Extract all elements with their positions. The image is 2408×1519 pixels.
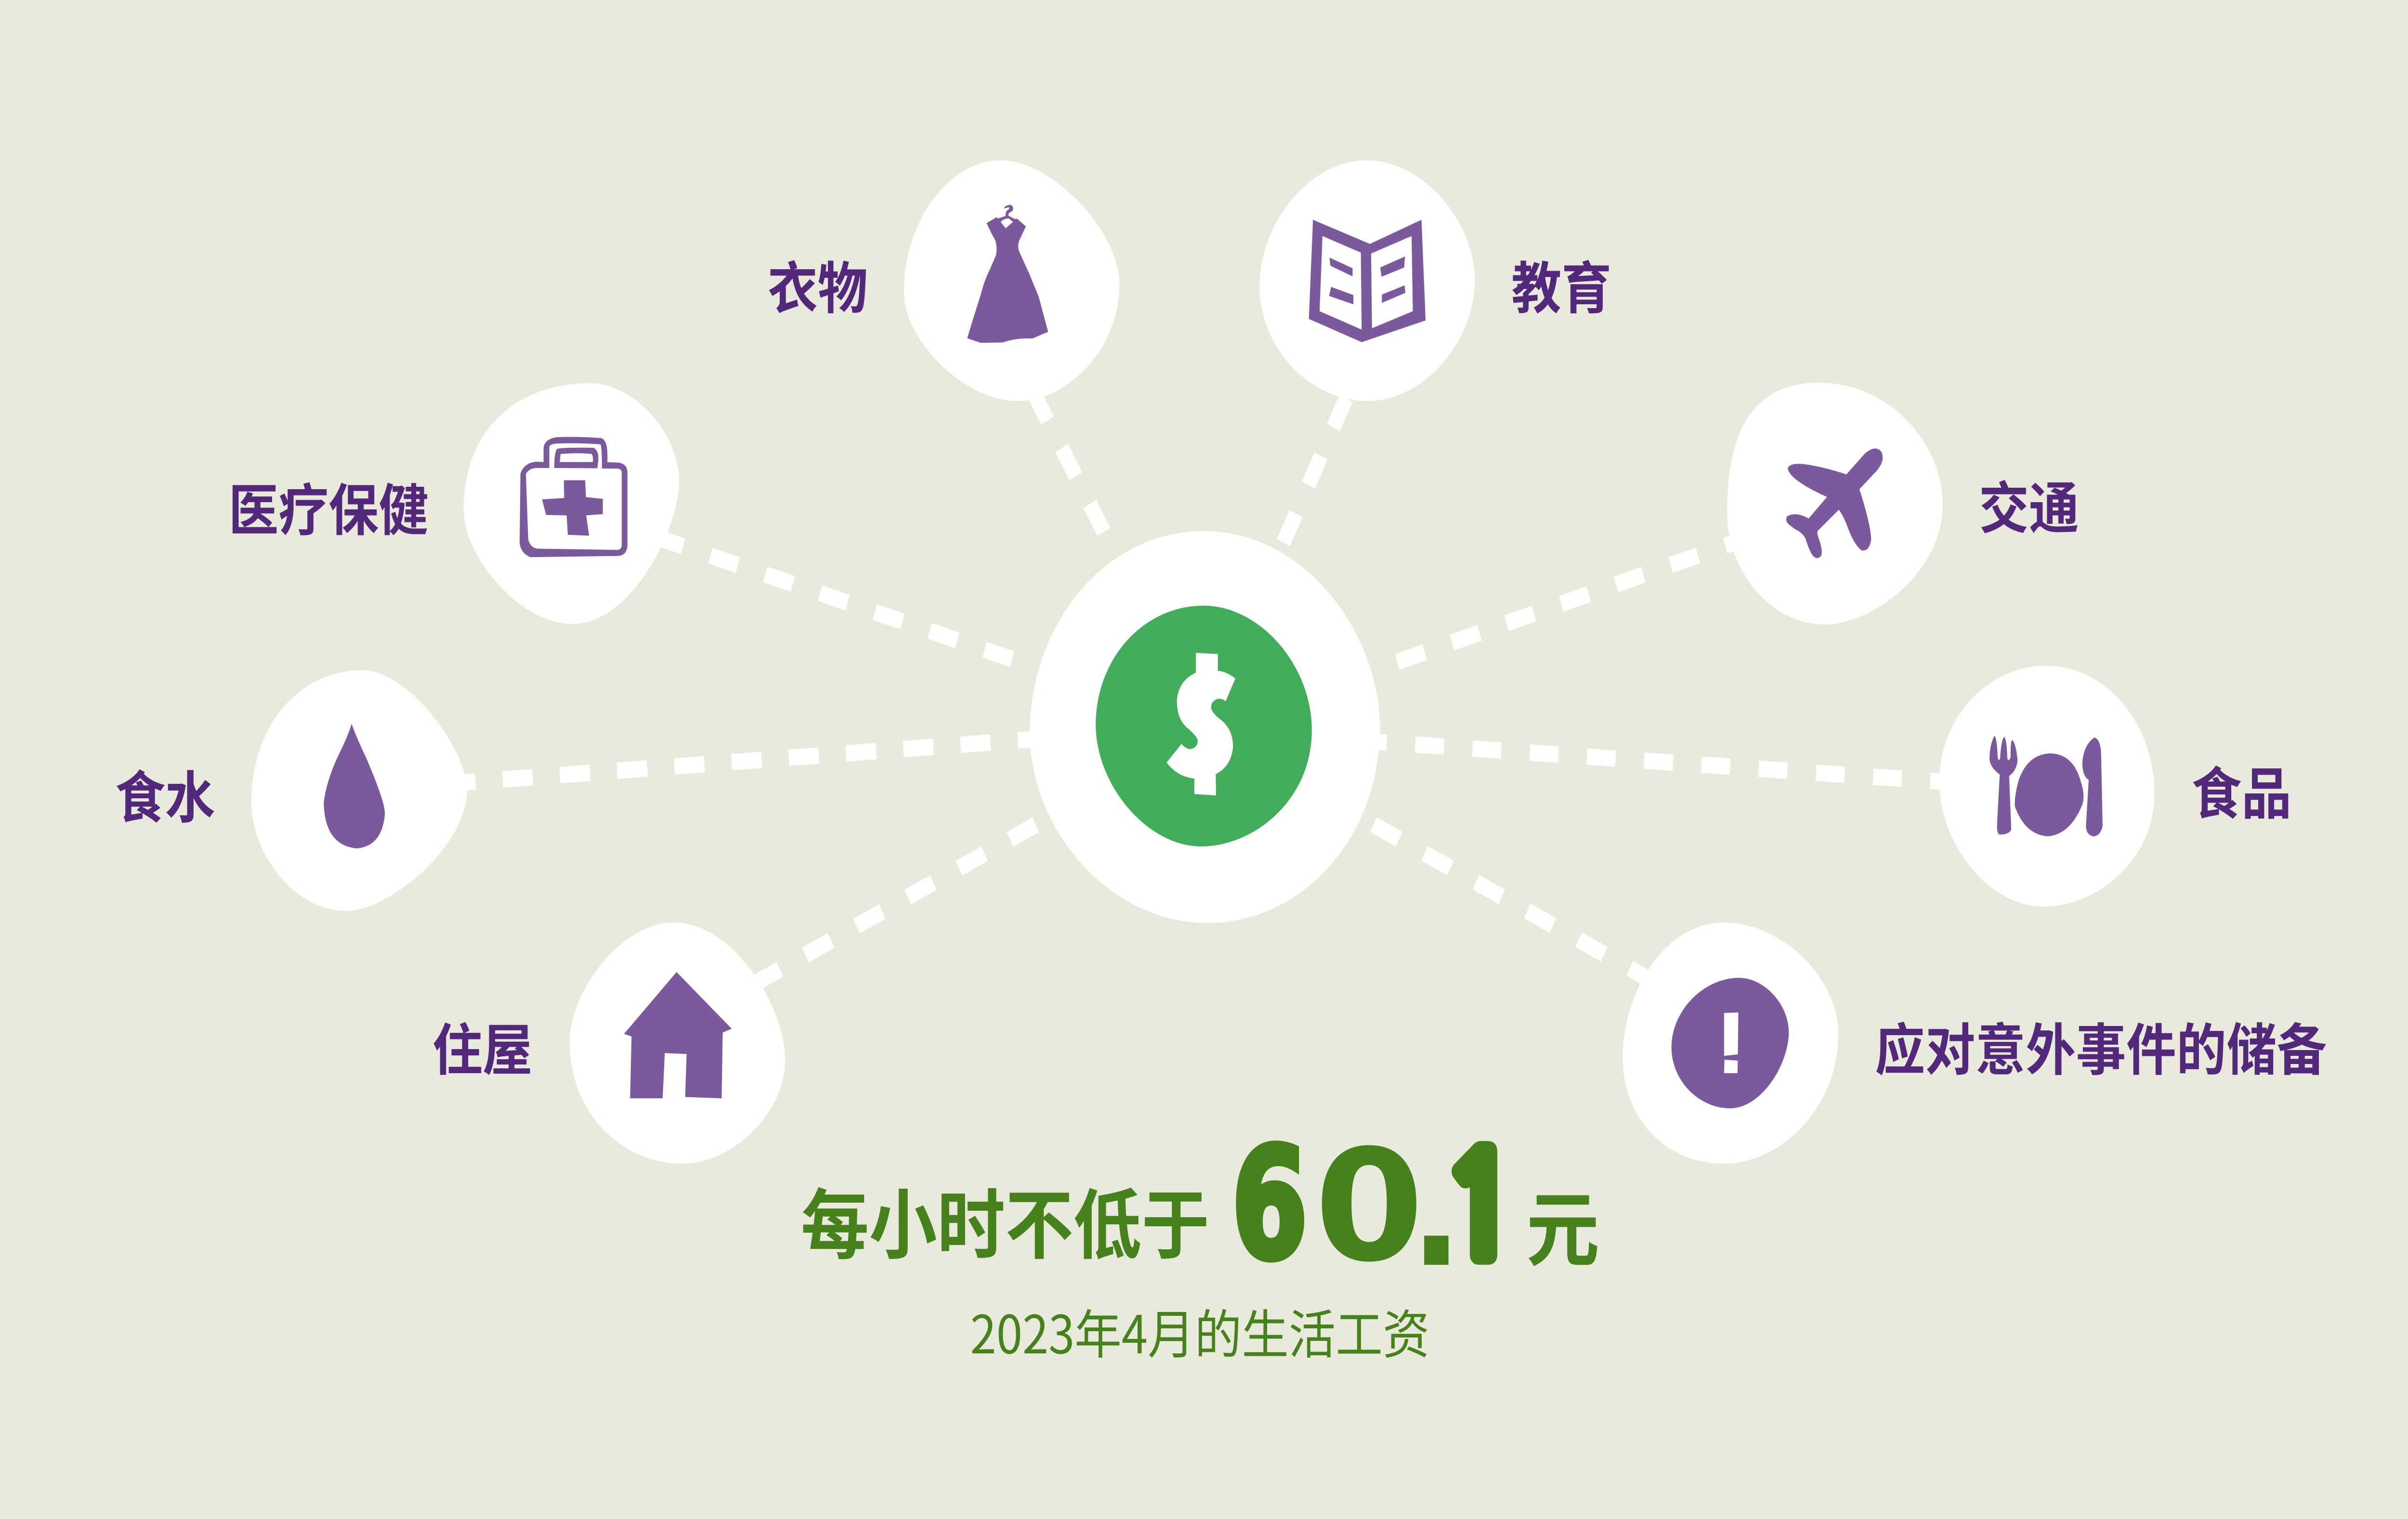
icon: airplane bbox=[1786, 448, 1883, 558]
subtitle: 2023年4月的生活工资 bbox=[970, 1293, 1430, 1369]
node: education bbox=[1260, 160, 1475, 401]
node: transport bbox=[1727, 383, 1943, 624]
label: education: 教育 bbox=[1511, 258, 1611, 320]
node: healthcare bbox=[464, 383, 679, 624]
wage figure: . bbox=[1410, 1122, 1463, 1301]
icon: plate and cutlery bbox=[1989, 736, 2103, 836]
label: healthcare: 医疗保健 bbox=[229, 480, 429, 542]
wage figure bbox=[1231, 1116, 1519, 1301]
icon: medical kit bbox=[520, 437, 628, 557]
node: food and water bbox=[251, 670, 467, 911]
wage figure: 0 bbox=[1314, 1117, 1424, 1296]
icon: exclamation bbox=[1672, 978, 1789, 1108]
label: housing: 住屋 bbox=[432, 1020, 533, 1082]
label: clothing: 衣物 bbox=[768, 258, 868, 320]
icon: dress bbox=[967, 205, 1048, 343]
wage figure: 6 bbox=[1231, 1116, 1308, 1294]
node: groceries bbox=[1939, 666, 2154, 907]
icon: house bbox=[624, 972, 732, 1098]
heading: hourly wage: 每小时不低于 bbox=[801, 1183, 1210, 1269]
wage figure: 1 bbox=[1442, 1137, 1519, 1278]
node: clothing bbox=[904, 160, 1119, 401]
label: transport: 交通 bbox=[1979, 478, 2079, 540]
heading: hourly wage: 元 bbox=[1526, 1185, 1599, 1277]
heading: hourly wage bbox=[801, 1116, 1599, 1301]
icon: water drop bbox=[324, 724, 385, 848]
icon: open book bbox=[1309, 220, 1426, 342]
central node: dollar bbox=[1030, 531, 1380, 923]
label: food and water: 食水 bbox=[115, 767, 215, 830]
dashed connectors bbox=[445, 395, 1953, 986]
node: emergency reserve bbox=[1623, 922, 1838, 1164]
node: housing bbox=[570, 922, 785, 1164]
label: groceries: 食品 bbox=[2192, 764, 2291, 826]
label: emergency reserve: 应对意外事件的储备 bbox=[1875, 1020, 2327, 1082]
